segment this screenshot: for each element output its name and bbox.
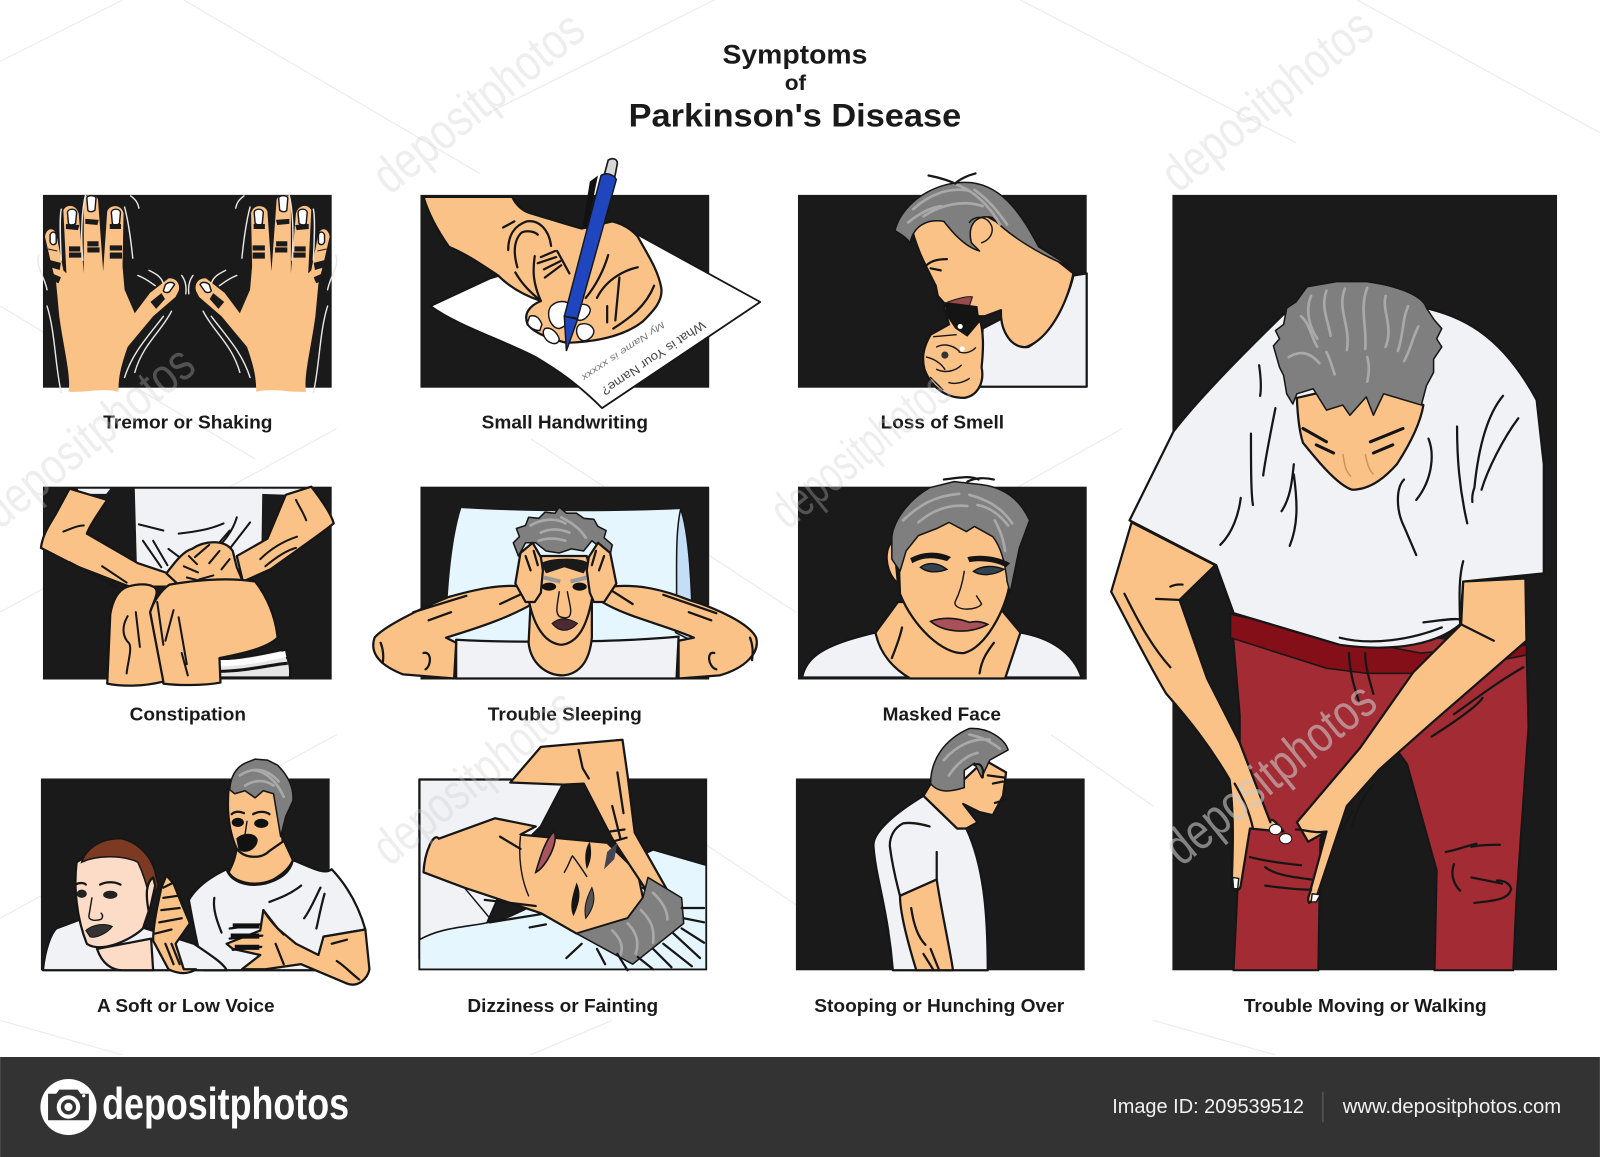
website: www.depositphotos.com: [1342, 1096, 1561, 1118]
arm wrinkles: [63, 500, 306, 587]
toilet: [216, 650, 290, 677]
right arm: [237, 487, 334, 582]
label: Masked Face: [883, 703, 1001, 724]
hair: [892, 477, 1030, 593]
eyes and brows: [910, 553, 1010, 575]
icon: pen: [564, 159, 617, 351]
head hands: [515, 543, 616, 602]
shirt: [873, 796, 988, 970]
title: [629, 39, 961, 134]
nails: [528, 301, 594, 344]
brows and nose: [1303, 429, 1403, 476]
arms: [373, 586, 757, 678]
panel: dizziness or fainting: [418, 740, 707, 970]
label: Loss of Smell: [881, 412, 1004, 433]
title: Symptoms: [722, 39, 867, 69]
label: Dizziness or Fainting: [467, 995, 658, 1016]
fingernails: [1233, 824, 1320, 902]
panel: tremor or shaking: [38, 194, 337, 393]
paper: [431, 235, 760, 408]
logo wordmark: depositphotos: [102, 1078, 349, 1129]
speaker hair: [230, 759, 293, 837]
face and head: [424, 818, 643, 934]
knee folds: [1250, 857, 1311, 890]
trousers: [1231, 614, 1528, 970]
speaker arm and hand: [227, 910, 369, 985]
icon: left trembling hand: [38, 194, 186, 393]
face: [1297, 383, 1423, 490]
paper: My Name is xxxxx: [579, 320, 667, 383]
facial features: [541, 559, 589, 630]
face: [898, 505, 1012, 653]
neck: [876, 602, 1020, 678]
speaker features: [232, 812, 269, 851]
cupped hand at ear: [147, 875, 196, 973]
watermarks: depositphotos: [361, 677, 587, 876]
watermarks: depositphotos: [1153, 671, 1387, 876]
image id: Image ID: 209539512: [1112, 1096, 1304, 1118]
title: of: [785, 71, 807, 95]
listener face: [75, 852, 153, 947]
raised arm: [510, 740, 679, 911]
shirt: [78, 489, 306, 582]
thigh and knees: [107, 579, 278, 686]
right arm: [1296, 578, 1526, 903]
eye and mouth: [924, 259, 947, 270]
ear: [887, 541, 898, 584]
listener shirt: [43, 913, 227, 970]
hair: [1273, 282, 1442, 415]
clasped hands: [166, 542, 243, 590]
pillow: [419, 850, 706, 969]
panel: masked face: [798, 477, 1087, 680]
label: Constipation: [130, 703, 246, 724]
speaker shirt: [189, 860, 365, 970]
pillow: [446, 508, 692, 643]
icon: camera logo: [40, 1079, 97, 1135]
hair: [895, 173, 1071, 267]
shirt wrinkles: [214, 860, 325, 933]
gray hair: [485, 877, 704, 970]
nose: [955, 571, 982, 609]
arm: [900, 879, 953, 970]
neck and face: [923, 760, 1006, 828]
listener features: [76, 882, 120, 937]
label: Tremor or Shaking: [103, 412, 273, 433]
paper: What is Your Name?: [599, 318, 708, 398]
panel: constipation: [41, 487, 334, 686]
mouth: [931, 618, 988, 631]
panel: a soft or low voice: [41, 759, 369, 985]
shirt: [456, 637, 679, 678]
neck: [529, 602, 592, 675]
sleeve: [890, 823, 937, 896]
panel: trouble moving or walking: [1111, 195, 1557, 970]
ear and eye: [974, 764, 1005, 803]
head: [910, 209, 1073, 347]
label: Trouble Moving or Walking: [1244, 995, 1487, 1016]
hair: [513, 507, 612, 559]
label: Stooping or Hunching Over: [814, 995, 1064, 1016]
label: Small Handwriting: [482, 412, 648, 433]
writing hand: [424, 197, 662, 344]
hair: [931, 728, 1008, 791]
panel: trouble sleeping: [373, 487, 757, 680]
listener hair: [82, 839, 158, 903]
eyes and brows: [464, 832, 617, 918]
label: A Soft or Low Voice: [97, 995, 275, 1016]
shirt area: [419, 779, 563, 959]
ear: [969, 217, 992, 243]
shirt: [1130, 308, 1544, 648]
watermarks: depositphotos: [759, 360, 961, 539]
shirt: [980, 273, 1087, 387]
shirt: [802, 633, 1082, 677]
panel: small handwriting: [420, 159, 760, 408]
panel: loss of smell: [798, 173, 1087, 398]
speaker face: [228, 775, 288, 857]
watermarks: [0, 0, 1387, 876]
footer bar: [0, 1057, 1600, 1157]
face: [528, 556, 594, 645]
hand at nose: [923, 302, 983, 398]
panel: stooping or hunching over: [796, 728, 1085, 970]
shirt wrinkles: [1220, 365, 1518, 641]
label: Trouble Sleeping: [488, 703, 642, 724]
icon: right trembling hand: [189, 194, 337, 393]
listener neck: [97, 939, 153, 970]
speaker neck: [229, 832, 293, 884]
title: Parkinson's Disease: [629, 97, 961, 134]
left arm: [1111, 522, 1284, 890]
left arm: [41, 489, 188, 587]
